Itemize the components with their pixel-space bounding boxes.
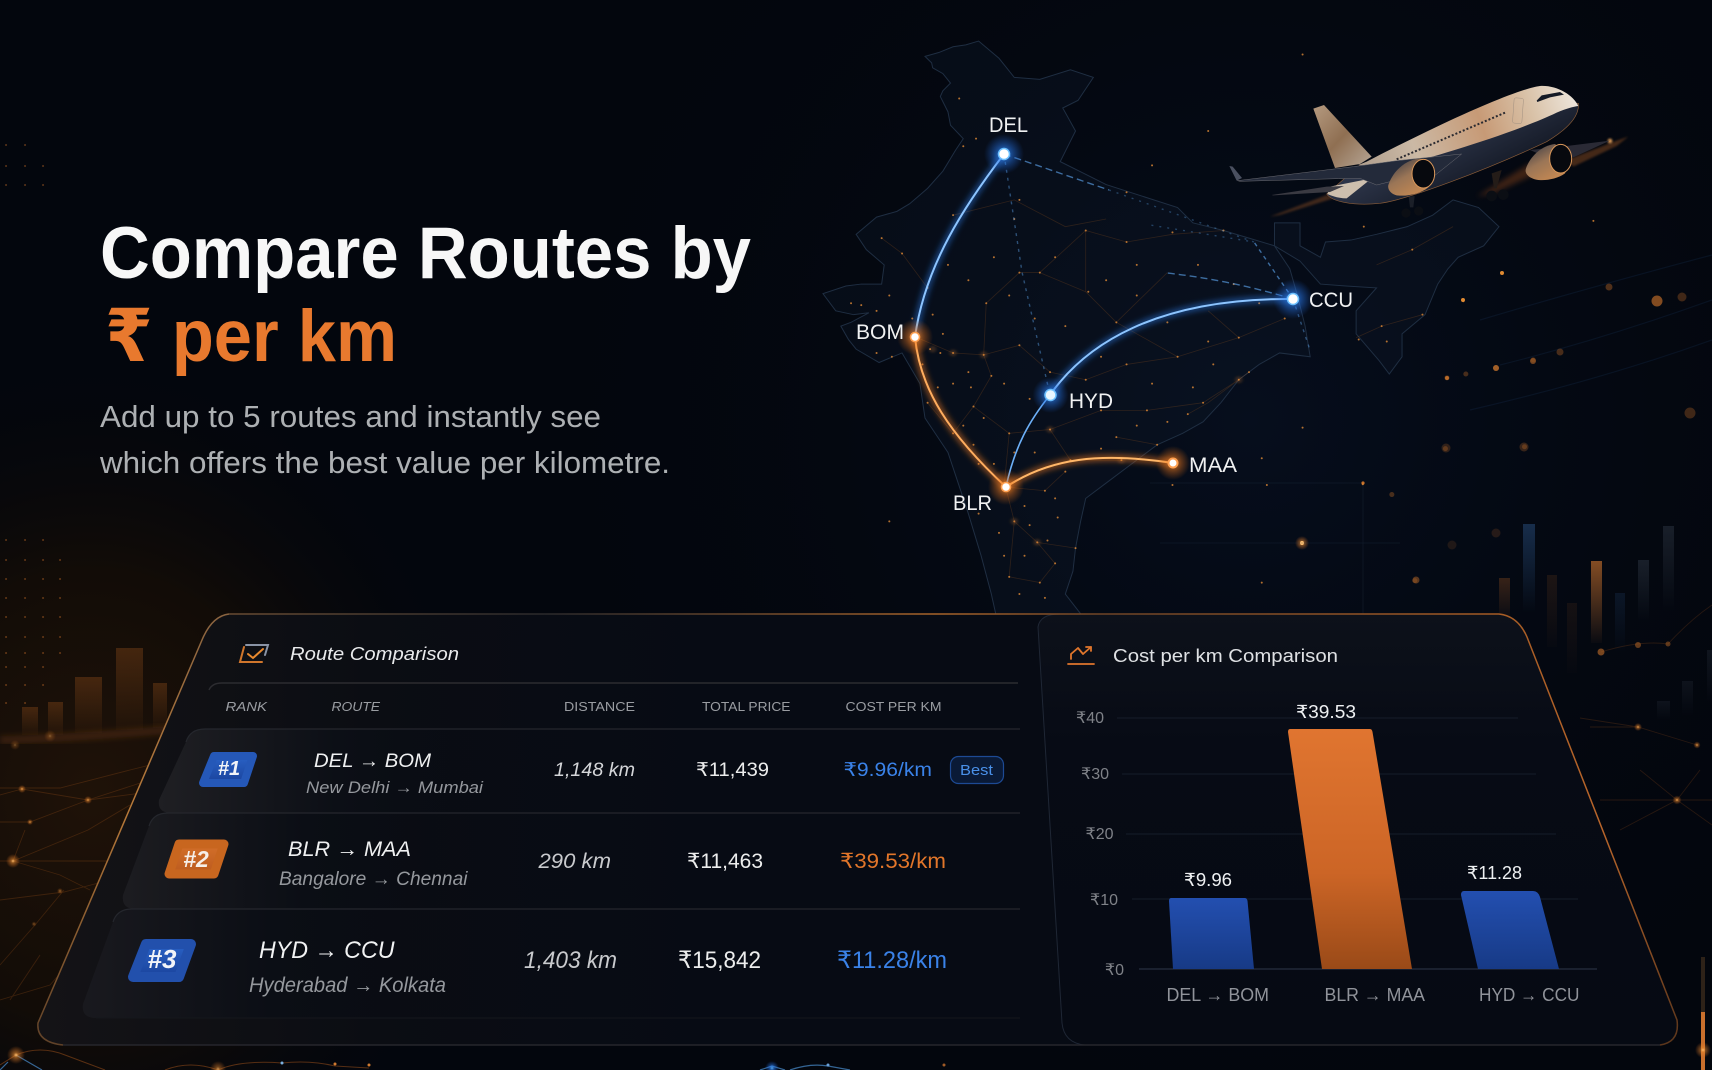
y-axis labels: ₹30 bbox=[1081, 766, 1109, 783]
title bbox=[100, 213, 751, 377]
header divider bbox=[209, 683, 1018, 690]
city labels: CCU bbox=[1309, 289, 1353, 312]
distance: 1,148 km bbox=[554, 760, 635, 781]
route text: DEL → BOM bbox=[314, 751, 431, 772]
map: city network lines bbox=[882, 200, 1453, 583]
plane: windows bbox=[1397, 113, 1505, 159]
x-axis labels: DEL → BOM bbox=[1166, 985, 1269, 1005]
background: left orange dot grid bbox=[6, 145, 60, 703]
bar: DEL to BOM bbox=[1169, 898, 1254, 969]
plane: rear belly bbox=[1327, 178, 1372, 198]
plane: far wing bbox=[1530, 141, 1610, 157]
subtitle bbox=[99, 399, 670, 480]
plane: engine glow trails bbox=[1270, 195, 1333, 217]
map: city light dots bbox=[851, 54, 1593, 598]
route text: HYD → CCU bbox=[259, 937, 395, 964]
cost per km: ₹9.96/km bbox=[844, 760, 932, 781]
plane: near engine bbox=[1388, 158, 1435, 196]
plane: near wing bbox=[1237, 154, 1462, 185]
cost per km: ₹11.28/km bbox=[837, 947, 947, 974]
route: HYD to CCU bbox=[1050, 299, 1293, 395]
plane: fuselage lower bbox=[1327, 103, 1578, 204]
best pill bbox=[950, 756, 1004, 784]
city labels: BOM bbox=[856, 321, 904, 344]
route text: New Delhi → Mumbai bbox=[306, 778, 484, 797]
background: right faint bars bbox=[1499, 524, 1712, 720]
y-axis labels bbox=[1076, 710, 1124, 979]
city labels: BLR bbox=[953, 492, 992, 515]
panel: route comparison table: TOTAL PRICE bbox=[702, 699, 791, 714]
background: right edge glowing bar bbox=[1695, 957, 1711, 1070]
distance: 1,403 km bbox=[524, 947, 617, 974]
route: BOM to BLR bbox=[915, 337, 1006, 487]
route: DEL to BOM bbox=[915, 154, 1004, 337]
column headers: RANK bbox=[226, 699, 269, 714]
plane: door bbox=[1512, 98, 1524, 124]
node: CCU bbox=[1273, 279, 1313, 319]
rank badge 2: #2 bbox=[183, 846, 209, 872]
chart icon bbox=[1068, 647, 1094, 664]
panel: route comparison table: COST PER KM bbox=[846, 699, 942, 714]
city labels: HYD bbox=[1069, 390, 1113, 413]
map outline bbox=[823, 41, 1499, 617]
node: MAA bbox=[1156, 446, 1190, 480]
panel: bottom edge bbox=[63, 1044, 1660, 1046]
bar value labels: ₹9.96 bbox=[1184, 870, 1232, 890]
row 1 bbox=[159, 729, 1020, 813]
airplane bbox=[1229, 86, 1628, 218]
price: ₹15,842 bbox=[678, 947, 761, 974]
panel: cost per km chart bbox=[1068, 646, 1597, 1005]
node: HYD bbox=[1032, 377, 1068, 413]
column headers bbox=[226, 699, 380, 714]
background: bottom network strip bbox=[0, 1046, 946, 1070]
bar value labels: ₹39.53 bbox=[1296, 702, 1356, 722]
bar: BLR to MAA bbox=[1288, 729, 1412, 969]
rank badge 1 bbox=[203, 756, 253, 783]
price: ₹11,463 bbox=[687, 850, 763, 873]
panel: left edge bbox=[38, 614, 229, 1045]
cost per km: ₹39.53/km bbox=[840, 850, 946, 873]
city labels: MAA bbox=[1189, 454, 1237, 477]
plane: winglet bbox=[1229, 166, 1242, 181]
bar: HYD to CCU bbox=[1461, 891, 1559, 969]
row 3 bbox=[83, 909, 1020, 1018]
price: ₹11,439 bbox=[696, 760, 769, 781]
route: BLR to HYD bbox=[1006, 395, 1050, 487]
title: ₹ per km bbox=[105, 296, 397, 377]
bar value labels bbox=[1184, 702, 1522, 890]
panel: dashboard container bbox=[38, 614, 1677, 1045]
y-axis labels: ₹10 bbox=[1090, 892, 1118, 909]
route text: Hyderabad → Kolkata bbox=[249, 974, 446, 997]
y-axis labels: ₹40 bbox=[1076, 710, 1104, 727]
plane: tail fin bbox=[1313, 105, 1372, 168]
route text bbox=[249, 937, 446, 997]
background: left network floor bbox=[0, 727, 210, 1000]
bar value labels: ₹11.28 bbox=[1467, 863, 1522, 883]
dashed blue secondary routes bbox=[1004, 154, 1310, 395]
panel: route comparison table: DISTANCE bbox=[564, 699, 635, 714]
table icon bbox=[240, 645, 268, 662]
route text bbox=[279, 838, 468, 890]
rank badge 2 bbox=[169, 844, 224, 874]
gridlines bbox=[1117, 718, 1578, 899]
x-axis labels bbox=[1166, 985, 1580, 1005]
background: right network and soft dots bbox=[1150, 255, 1712, 830]
best pill: Best bbox=[960, 762, 994, 779]
x-axis labels: BLR → MAA bbox=[1324, 985, 1425, 1005]
panel: top edge bbox=[229, 613, 1499, 615]
map: bright city glow clusters bbox=[933, 349, 1239, 542]
title: Compare Routes by bbox=[100, 213, 751, 294]
route text: Bangalore → Chennai bbox=[279, 869, 468, 890]
plane: fuselage upper bbox=[1358, 86, 1578, 167]
node: DEL bbox=[984, 134, 1024, 174]
node: BOM bbox=[897, 319, 933, 355]
rank badge 3: #3 bbox=[148, 944, 177, 974]
row 2 bbox=[123, 813, 1020, 909]
route: BLR to MAA bbox=[1006, 458, 1173, 487]
panel: body bbox=[38, 614, 1677, 1045]
table heading: Route Comparison bbox=[290, 644, 459, 664]
panel: right edge bbox=[1499, 614, 1677, 1045]
panel: route comparison table bbox=[83, 644, 1020, 1018]
rank badge 1: #1 bbox=[218, 758, 240, 780]
y-axis labels: ₹20 bbox=[1086, 826, 1114, 843]
chart heading: Cost per km Comparison bbox=[1113, 646, 1338, 666]
subtitle: Add up to 5 routes and instantly see bbox=[100, 399, 601, 434]
city labels: DEL bbox=[989, 114, 1028, 137]
route text bbox=[306, 751, 484, 797]
background: left network glow nodes bbox=[6, 730, 92, 926]
plane: far engine bbox=[1526, 144, 1572, 180]
background: left faint skyline bars bbox=[22, 648, 167, 735]
column headers: ROUTE bbox=[332, 699, 380, 714]
plane: stabiliser bbox=[1272, 186, 1344, 195]
route: glowing arcs bbox=[915, 154, 1293, 487]
y-axis labels: ₹0 bbox=[1105, 962, 1124, 979]
subtitle: which offers the best value per kilometre. bbox=[99, 445, 670, 480]
node: BLR bbox=[988, 469, 1024, 505]
route text: BLR → MAA bbox=[288, 838, 411, 861]
axis baseline bbox=[1139, 968, 1597, 970]
rank badge 3 bbox=[133, 944, 191, 977]
plane: landing gear bbox=[1401, 170, 1509, 218]
city labels bbox=[856, 114, 1353, 515]
India map bbox=[823, 41, 1593, 617]
x-axis labels: HYD → CCU bbox=[1479, 985, 1580, 1005]
map: outer soft dots stream bbox=[1392, 360, 1533, 581]
distance: 290 km bbox=[537, 850, 611, 873]
panel: chart section body bbox=[1038, 614, 1677, 1045]
